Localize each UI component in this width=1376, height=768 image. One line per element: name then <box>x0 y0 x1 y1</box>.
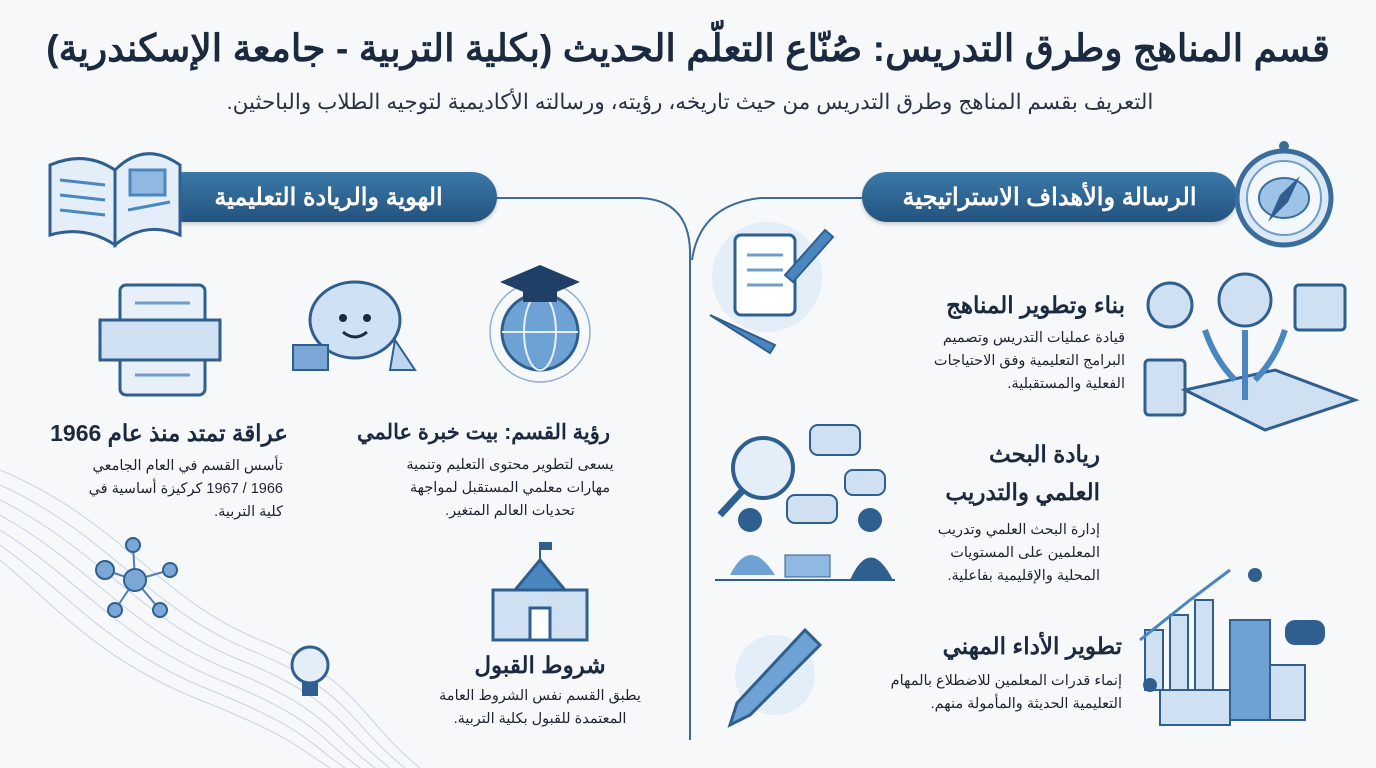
divider <box>497 198 690 740</box>
block: legacy 1966: كلية التربية. <box>214 504 283 520</box>
icon: open book <box>48 152 182 248</box>
block: research leadership <box>938 441 1100 584</box>
panel header: identity <box>160 172 497 222</box>
icon: scroll <box>98 284 222 396</box>
block: legacy 1966: عراقة تمتد منذ عام 1966 <box>50 420 288 446</box>
icon: pencil <box>728 628 822 728</box>
block: curriculum: الفعلية والمستقبلية. <box>1007 376 1125 392</box>
icon: brain with books <box>292 280 417 371</box>
title: قسم المناهج وطرق التدريس: صُنّاع التعلّم الحديث (بكلية التربية - جامعة الإسكندرية) <box>46 27 1330 69</box>
icon: research team <box>715 424 895 581</box>
block: professional development <box>891 632 1122 712</box>
block: vision <box>357 421 614 519</box>
block: research leadership: ريادة البحث <box>989 441 1100 467</box>
icon: compass brain <box>1234 141 1334 248</box>
icon: school building <box>492 542 588 642</box>
icon: growth chart with people <box>1139 568 1325 726</box>
block: curriculum: قيادة عمليات التدريس وتصميم <box>943 330 1125 346</box>
icon: tablet and pencil <box>710 222 834 354</box>
icon: lightbulb <box>290 646 330 696</box>
panel header: mission: الرسالة والأهداف الاستراتيجية <box>902 184 1197 210</box>
block: research leadership: العلمي والتدريب <box>945 479 1100 505</box>
block: vision: مهارات معلمي المستقبل لمواجهة <box>410 480 610 496</box>
block: curriculum: البرامج التعليمية وفق الاحتياجات <box>934 353 1125 369</box>
icon: globe with cap <box>489 265 591 383</box>
block: curriculum: بناء وتطوير المناهج <box>946 292 1125 318</box>
subtitle: التعريف بقسم المناهج وطرق التدريس من حيث تاريخه، رؤيته، ورسالته الأكاديمية لتوجيه الطلاب والباحثين. <box>227 90 1153 114</box>
block: admission: المعتمدة للقبول بكلية التربية. <box>454 711 626 727</box>
panel header: identity: الهوية والريادة التعليمية <box>214 184 443 210</box>
block: professional development: تطوير الأداء المهني <box>943 633 1122 659</box>
panel header: mission <box>862 172 1237 222</box>
block: legacy 1966 <box>50 420 288 520</box>
block: vision: يسعى لتطوير محتوى التعليم وتنمية <box>406 457 614 473</box>
block: admission <box>439 652 641 727</box>
icon: network <box>95 537 178 618</box>
block: legacy 1966: 1966 / 1967 كركيزة أساسية في <box>89 481 283 497</box>
block: curriculum <box>934 292 1125 392</box>
block: research leadership: المعلمين على المستويات <box>950 545 1100 561</box>
block: admission: شروط القبول <box>474 652 606 678</box>
block: professional development: إنماء قدرات المعلمين للاضطلاع بالمهام <box>891 673 1122 689</box>
block: research leadership: إدارة البحث العلمي وتدريب <box>938 522 1100 538</box>
block: vision: تحديات العالم المتغير. <box>445 503 575 519</box>
block: vision: رؤية القسم: بيت خبرة عالمي <box>357 421 610 444</box>
block: professional development: التعليمية الحديثة والمأمولة منهم. <box>931 696 1122 712</box>
block: research leadership: المحلية والإقليمية بفاعلية. <box>947 568 1100 584</box>
block: admission: يطبق القسم نفس الشروط العامة <box>439 688 641 704</box>
icon: gears and devices <box>1144 272 1360 432</box>
block: legacy 1966: تأسس القسم في العام الجامعي <box>92 458 283 474</box>
